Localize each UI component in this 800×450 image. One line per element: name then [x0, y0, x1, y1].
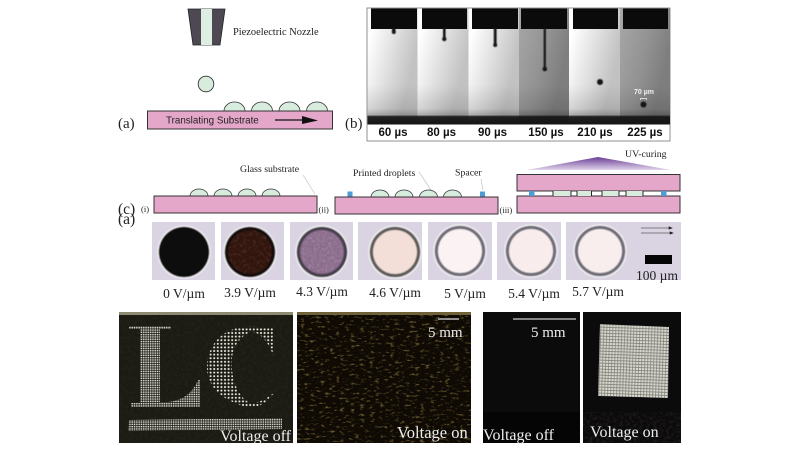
micrograph 5.7 V/µm with scale bar — [566, 222, 681, 283]
droplet size annotation: 70 µm — [634, 89, 654, 96]
spacer label: Spacer — [455, 168, 482, 178]
voltage labels: 0 V/µm — [163, 286, 205, 301]
time labels: 90 µs — [478, 127, 507, 139]
deposited droplets — [224, 102, 328, 111]
scale bar — [645, 255, 672, 264]
nozzle silhouettes — [371, 8, 668, 29]
diagram: piezoelectric nozzle and translating substrate — [148, 9, 332, 129]
translating substrate — [148, 111, 332, 129]
substrate label: Translating Substrate — [166, 116, 259, 126]
arrow: substrate direction — [275, 116, 318, 124]
ejected ink jets — [392, 28, 646, 108]
arrow: polarizer directions — [641, 227, 673, 234]
photo: LC pattern voltage off — [119, 312, 293, 445]
voltage labels: 5.4 V/µm — [508, 286, 560, 301]
time labels — [378, 127, 663, 139]
voltage labels: 4.6 V/µm — [369, 285, 421, 300]
micrograph 5.4 V/µm — [497, 222, 561, 280]
step (iii) label: (iii) — [500, 205, 512, 215]
step ii: substrate with droplets and spacers — [335, 190, 498, 214]
panel: high-speed droplet image sequence — [367, 8, 670, 141]
voltage labels: 5.7 V/µm — [572, 284, 624, 299]
voltage labels — [163, 284, 624, 301]
leader lines — [303, 172, 483, 194]
step iii: UV curing between two substrates — [517, 157, 680, 213]
caption: Voltage off — [483, 427, 555, 444]
glass substrate label: Glass substrate — [240, 164, 300, 175]
printed square pattern — [598, 324, 669, 398]
UV-curing label: UV-curing — [625, 149, 667, 160]
time labels: 60 µs — [378, 127, 408, 139]
time labels: 225 µs — [627, 127, 663, 139]
printed letter L — [129, 326, 200, 407]
voltage labels: 4.3 V/µm — [296, 284, 348, 299]
voltage labels: 5 V/µm — [444, 286, 486, 301]
voltage labels: 3.9 V/µm — [224, 285, 276, 300]
label (c): (c) — [118, 201, 135, 218]
photo: square pattern voltage on — [583, 312, 681, 443]
micrograph 0 V/µm — [152, 222, 215, 280]
micrograph 4.3 V/µm — [290, 222, 353, 280]
UV light — [527, 157, 671, 170]
time labels: 150 µs — [528, 127, 564, 139]
panel: fabrication process (c) — [118, 149, 680, 218]
micrograph 3.9 V/µm — [221, 222, 284, 280]
scale label: 100 µm — [636, 268, 678, 283]
step (i) label: (i) — [141, 204, 149, 214]
scale bar — [513, 318, 576, 320]
step (ii) label: (ii) — [318, 204, 329, 214]
scale bar — [438, 318, 459, 320]
printed underline bar — [128, 418, 282, 431]
micrograph 4.6 V/µm — [358, 222, 422, 280]
time labels: 80 µs — [427, 127, 456, 139]
printed letter C — [207, 327, 276, 407]
panel label (a): (a) — [118, 116, 135, 132]
nozzle label: Piezoelectric Nozzle — [233, 27, 319, 38]
caption: Voltage on — [590, 424, 659, 441]
scale label: 5 mm — [531, 325, 566, 341]
scale label: 5 mm — [428, 325, 463, 341]
falling droplet — [198, 76, 214, 92]
panel: droplet micrographs vs voltage — [152, 222, 681, 301]
panel label (b): (b) — [345, 116, 362, 132]
label (a) of micrograph row: (a) — [118, 211, 135, 228]
caption: Voltage on — [397, 423, 468, 442]
time labels: 210 µs — [577, 127, 613, 139]
printed droplets label: Printed droplets — [353, 168, 415, 179]
micrograph 5 V/µm — [428, 222, 492, 280]
step i: substrate with droplets — [154, 189, 317, 213]
photo: LC pattern voltage on — [297, 312, 471, 443]
droplet size annotation — [634, 89, 654, 100]
photo: square pattern voltage off — [483, 312, 580, 444]
icon: piezoelectric nozzle — [188, 9, 225, 45]
caption: Voltage off — [220, 428, 292, 445]
